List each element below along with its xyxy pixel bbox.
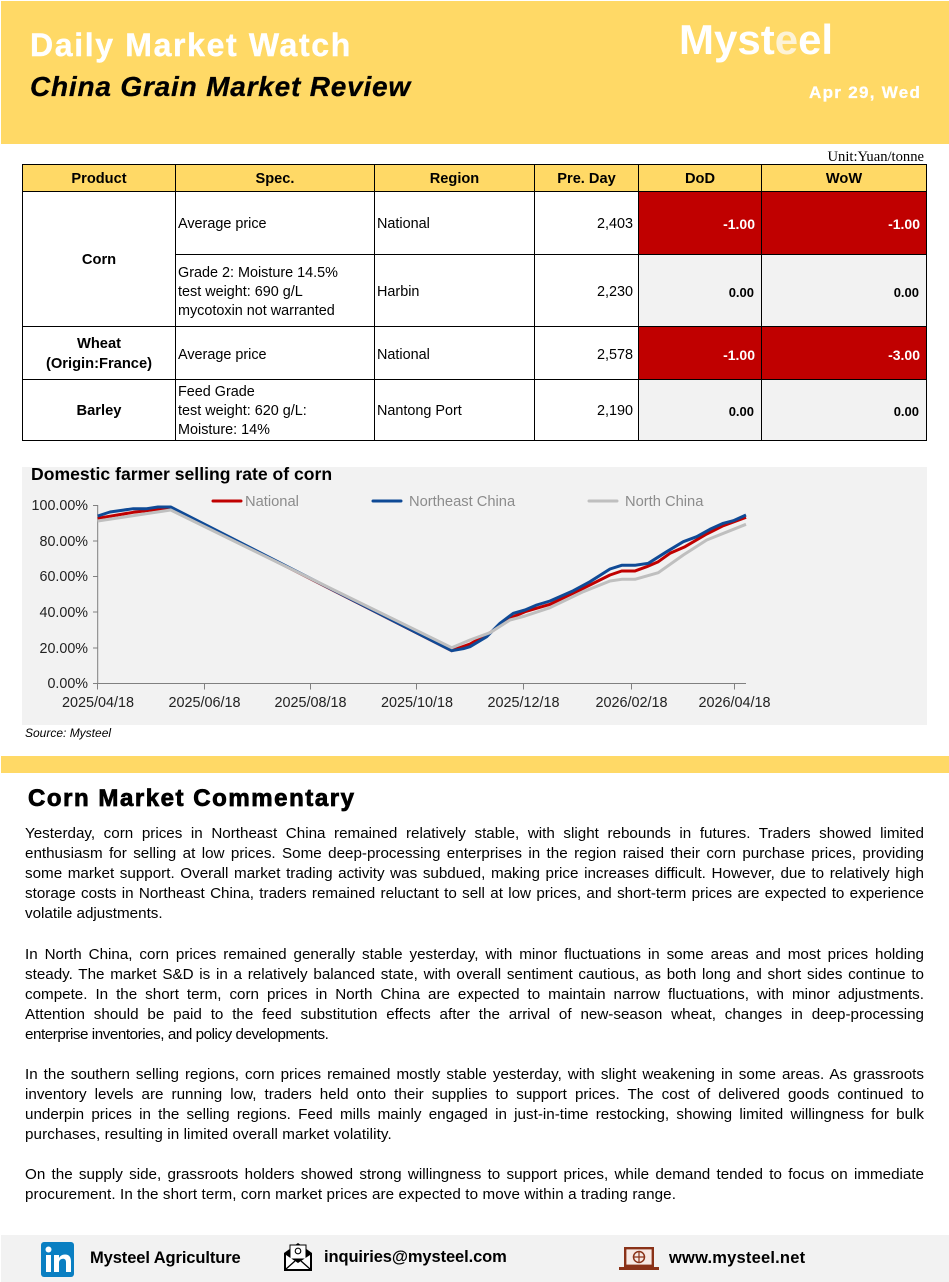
x axis: 2025/08/18 — [274, 695, 347, 711]
unit label: Unit:Yuan/tonne — [828, 149, 924, 165]
price table: Wheat — [77, 336, 121, 352]
series: Northeast China — [98, 507, 746, 651]
paragraph 3: underpin prices in the selling regions. Feed mills mainly engaged in just-in-time restocking, showing limited willingness for bulk — [25, 1106, 924, 1123]
legend — [213, 494, 704, 510]
price table: test weight: 690 g/L — [178, 284, 303, 300]
price table: test weight: 620 g/L: — [178, 403, 307, 419]
y axis: 20.00% — [40, 641, 88, 657]
label: Mysteel Agriculture: Mysteel Agriculture — [90, 1249, 241, 1267]
price table: National — [377, 216, 430, 232]
x axis: 2025/06/18 — [168, 695, 241, 711]
chart panel: domestic farmer selling rate of corn — [22, 464, 927, 740]
label: website: www.mysteel.net — [669, 1249, 805, 1267]
price table: -1.00 — [723, 216, 755, 232]
legend: North China — [625, 494, 704, 510]
price table: mycotoxin not warranted — [178, 303, 335, 319]
paragraph 1: storage costs in Northeast China, traders remained reluctant to sell at low prices, and short-term prices are expected to experience — [25, 885, 924, 902]
legend: National — [245, 494, 299, 510]
price table: 2,190 — [597, 402, 633, 418]
footer bar — [1, 1235, 949, 1282]
price table: Spec. — [256, 170, 294, 186]
paragraph 4 — [25, 1166, 924, 1203]
subtitle: China Grain Market Review: China Grain Market Review — [30, 71, 411, 102]
price table: Region — [430, 170, 479, 186]
paragraph 2: compete. In the short term, corn prices in North China are expected to maintain narrow fluctuations, with minor adjustments. — [25, 986, 924, 1003]
price table: Nantong Port — [377, 402, 462, 418]
paragraph 3: inventory levels are running low, traders held onto their supplies to support prices. The cost of delivered goods continued to — [25, 1086, 924, 1103]
icon: LinkedIn — [41, 1242, 74, 1277]
paragraph 2 — [25, 946, 924, 1043]
price table: 2,403 — [597, 216, 633, 232]
y axis: 0.00% — [47, 676, 88, 692]
title: Daily Market Watch: Daily Market Watch — [30, 27, 352, 63]
paragraph 1: volatile adjustments. — [25, 905, 163, 922]
icon: laptop with globe — [619, 1247, 659, 1270]
price table: 2,230 — [597, 284, 633, 300]
price table: 0.00 — [894, 404, 919, 418]
price table: Product — [71, 170, 127, 186]
price table: 0.00 — [894, 285, 919, 300]
x axis: 2025/12/18 — [487, 695, 560, 711]
price table: 0.00 — [729, 404, 754, 418]
price table: Feed Grade — [178, 384, 255, 400]
price table: Grade 2: Moisture 14.5% — [178, 265, 338, 281]
x axis: 2026/02/18 — [595, 695, 668, 711]
legend: Northeast China — [409, 494, 516, 510]
y axis: 100.00% — [32, 498, 88, 514]
paragraph 4: On the supply side, grassroots holders showed strong willingness to support prices, while demand tended to focus on immediate — [25, 1166, 924, 1183]
price table: DoD — [685, 170, 715, 186]
logo: Mysteel: Mysteel — [679, 16, 833, 63]
price table: Barley — [77, 402, 121, 418]
price table: -3.00 — [888, 346, 920, 362]
date: Apr 29, Wed — [809, 83, 921, 102]
paragraph 2: enterprise inventories, and policy developments. — [25, 1026, 328, 1043]
paragraph 1: enthusiasm for selling at low prices. Some deep-processing enterprises in the region raised their corn purchase prices, providing — [25, 845, 924, 862]
paragraph 2: Attention should be paid to the feed substitution effects after the arrival of new-season wheat, changes in deep-processing — [25, 1006, 924, 1023]
x axis: 2025/10/18 — [381, 695, 453, 711]
yellow divider band — [1, 756, 949, 773]
x axis: 2025/04/18 — [62, 695, 134, 711]
series: National — [98, 508, 746, 651]
x axis: 2026/04/18 — [698, 695, 771, 711]
heading: Corn Market Commentary: Corn Market Commentary — [28, 785, 356, 812]
y axis: 60.00% — [40, 569, 88, 585]
price table — [22, 164, 927, 441]
paragraph 1 — [25, 825, 924, 922]
price table: Pre. Day — [557, 170, 616, 186]
price table: -1.00 — [888, 216, 920, 232]
paragraph 1: Yesterday, corn prices in Northeast China remained relatively stable, with slight rebounds in futures. Traders showed limited — [25, 825, 924, 842]
paragraph 3: purchases, resulting in limited overall market volatility. — [25, 1126, 392, 1143]
price table: -1.00 — [723, 346, 755, 362]
price table: 0.00 — [729, 285, 754, 300]
y axis: 80.00% — [40, 534, 88, 550]
price table: (Origin:France) — [46, 356, 152, 372]
price table: 2,578 — [597, 346, 633, 362]
icon: envelope — [284, 1243, 312, 1271]
y axis — [32, 498, 98, 692]
paragraph 2: In North China, corn prices remained generally stable yesterday, with minor fluctuations in some areas and most prices holding — [25, 946, 924, 963]
price table: Corn — [82, 252, 116, 268]
x axis — [62, 684, 771, 711]
price table: Moisture: 14% — [178, 422, 270, 438]
chart title: Domestic farmer selling rate of corn — [31, 464, 332, 484]
paragraph 3: In the southern selling regions, corn prices remained mostly stable yesterday, with slight weakening in some areas. As grassroots — [25, 1066, 924, 1083]
price table: National — [377, 346, 430, 362]
source note: Source: Mysteel — [25, 726, 111, 740]
commentary text — [25, 825, 924, 1203]
paragraph 2: steady. The market S&D is in a relatively balanced state, with overall sentiment cautious, as both long and short sides continue to — [25, 966, 924, 983]
series: North China — [98, 510, 746, 648]
paragraph 1: some market support. Overall market trading activity was subdued, making price increases difficult. However, due to relatively high — [25, 865, 924, 882]
price table: Harbin — [377, 284, 419, 300]
header banner — [1, 1, 949, 144]
label: email: inquiries@mysteel.com — [324, 1248, 507, 1266]
price table: Average price — [178, 216, 267, 232]
paragraph 4: procurement. In the short term, corn market prices are expected to move within a trading range. — [25, 1186, 676, 1203]
paragraph 3 — [25, 1066, 924, 1143]
y axis: 40.00% — [40, 605, 88, 621]
price table: WoW — [826, 170, 862, 186]
price table: Average price — [178, 346, 267, 362]
